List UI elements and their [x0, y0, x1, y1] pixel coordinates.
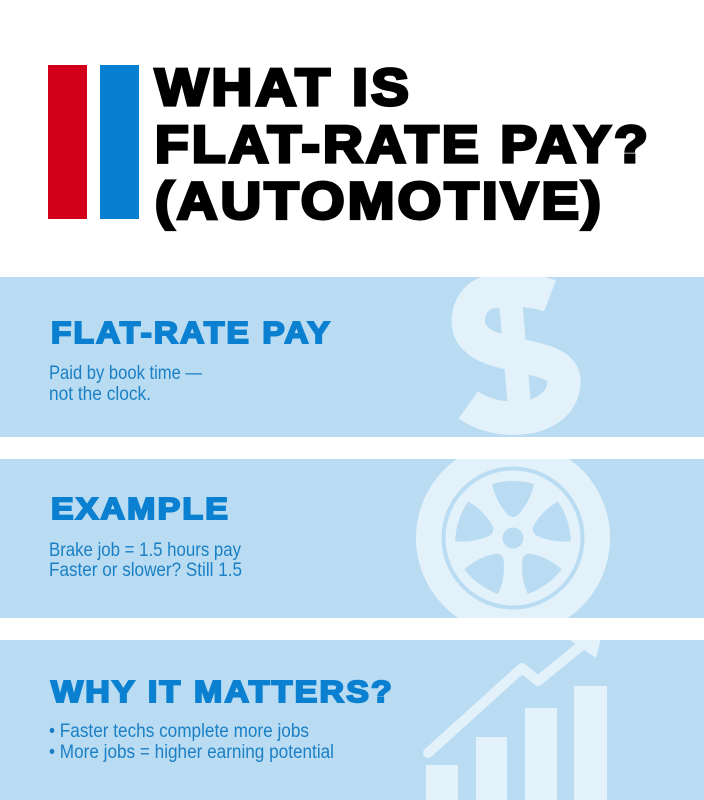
panel: example: [0, 459, 704, 618]
text: example description: Brake job = 1.5 hours pay: [49, 540, 241, 561]
title: WHAT IS: [155, 59, 412, 117]
panel: flat-rate pay: [0, 273, 704, 437]
text: example description: Faster or slower? Still 1.5: [49, 560, 242, 581]
title: FLAT-RATE PAY?: [155, 116, 651, 174]
text: flat-rate description: not the clock.: [49, 384, 151, 405]
header accent bars: [48, 65, 139, 219]
title: (AUTOMOTIVE): [155, 172, 604, 230]
icon: trend arrow: [428, 634, 602, 753]
panel: why it matters: [0, 634, 704, 800]
text: flat-rate description: Paid by book time —: [49, 363, 202, 384]
icon: dollar sign: [468, 273, 564, 433]
title: [155, 59, 651, 230]
heading: example: EXAMPLE: [51, 491, 230, 526]
text: why it matters bullets: [49, 721, 334, 763]
heading: flat-rate pay: FLAT-RATE PAY: [51, 315, 332, 350]
heading: why it matters: WHY IT MATTERS?: [51, 674, 394, 709]
text: why it matters bullets: • Faster techs complete more jobs: [49, 721, 309, 742]
text: flat-rate description: [49, 363, 202, 405]
text: example description: [49, 540, 242, 581]
text: why it matters bullets: • More jobs = higher earning potential: [49, 742, 334, 763]
icon: wheel: [416, 459, 610, 618]
icon: rising bar chart: [426, 634, 607, 800]
